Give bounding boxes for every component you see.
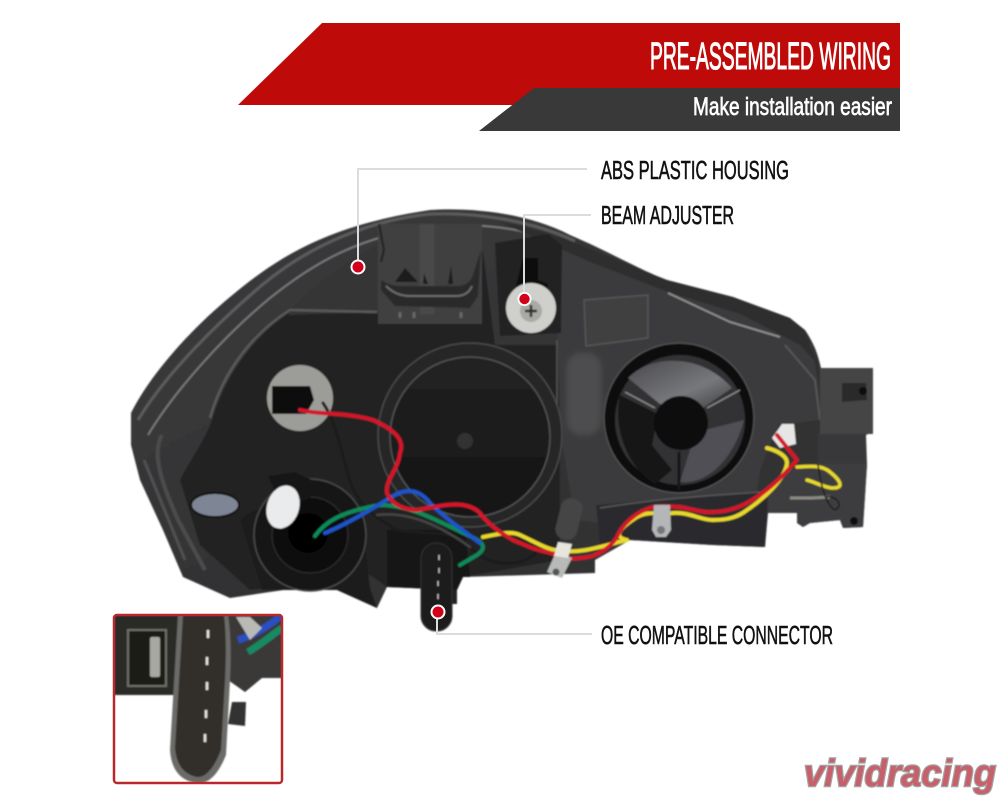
leader: connector (437, 616, 592, 634)
clip screw (552, 568, 560, 576)
cup gloss bottom (680, 420, 744, 482)
blue wire (325, 491, 480, 543)
cup inner disc (615, 355, 745, 485)
connector pins (438, 555, 439, 599)
inset blue wire (238, 615, 282, 640)
right round dust cup (604, 343, 754, 493)
inset connector face (175, 615, 226, 777)
cup center (654, 396, 708, 450)
label: oe compatible connector: OE COMPATIBLE CONNECTOR (601, 622, 833, 650)
dot: beam adjuster (518, 292, 532, 306)
right yellow loop (797, 466, 840, 488)
tray dividing line (600, 492, 760, 508)
grey wire (377, 514, 470, 547)
cup gloss left dark (618, 395, 672, 484)
right bracket (768, 368, 873, 528)
bracket lower block (768, 464, 867, 528)
dark subtitle banner (479, 88, 900, 131)
housing ridge highlight (668, 293, 780, 337)
cap face (390, 357, 550, 517)
subtitle: make installation easier: Make installation easier (693, 93, 892, 121)
socket ring (254, 479, 366, 591)
white cutout near bracket (772, 424, 796, 448)
leader: abs housing (358, 169, 587, 262)
leader: beam adjuster (524, 215, 591, 295)
inset panel: connector close-up (114, 615, 282, 783)
cup outer ring (604, 343, 754, 493)
callout dots (350, 260, 532, 620)
socket hole (288, 513, 328, 553)
right housing panel (555, 240, 820, 525)
inset red border (114, 615, 282, 783)
red title banner (238, 23, 900, 105)
wire clip right (652, 505, 671, 537)
inner dark panel (180, 250, 560, 590)
inset dark housing right (222, 615, 282, 692)
connector U inner (386, 286, 472, 296)
label: beam adjuster: BEAM ADJUSTER (601, 202, 734, 230)
inset white wire clip (236, 617, 262, 640)
cap outer ring (378, 343, 562, 527)
lower right tray (596, 490, 768, 547)
right black loop (818, 465, 839, 510)
cap nub (457, 433, 473, 449)
connector back panel (378, 224, 482, 324)
socket inner ring (272, 497, 348, 573)
wire harness (300, 403, 840, 565)
connector body (421, 543, 452, 631)
connector pins (395, 266, 453, 284)
green wire (315, 505, 483, 565)
adjuster recess (495, 234, 562, 336)
white bulb and black lead (261, 472, 312, 533)
watermark logo: vividracing (804, 753, 996, 795)
pillar (553, 496, 585, 542)
rib (556, 340, 558, 420)
white bulb (261, 481, 305, 533)
red wire (300, 410, 797, 559)
stamp rectangle (584, 295, 648, 346)
cup bottom spoke (678, 452, 680, 490)
inset pins (205, 630, 208, 742)
inset white background (114, 615, 282, 783)
connector light streak (420, 224, 434, 314)
inset terminal socket (128, 630, 166, 686)
inset dark housing left (114, 615, 178, 695)
headlight photo illustration (131, 209, 873, 631)
wire clip left (547, 542, 572, 578)
connector U socket (381, 250, 481, 308)
bracket band (818, 434, 866, 464)
large dust cap (378, 343, 562, 527)
adjuster screw head (520, 300, 542, 322)
black wire (323, 403, 537, 563)
connector edge (379, 224, 384, 262)
bracket tab (842, 383, 867, 402)
clip metal (652, 505, 671, 537)
lower left dark socket panel (240, 500, 377, 608)
inset green wire (248, 628, 282, 652)
yellow wire (483, 448, 787, 551)
inset metal pin (150, 637, 160, 677)
upper ledge panel (288, 245, 378, 315)
screw stud (790, 497, 830, 498)
clip screw (657, 526, 665, 534)
label: abs plastic housing: ABS PLASTIC HOUSING (601, 157, 789, 185)
adjuster washer (506, 283, 556, 333)
leader lines (358, 169, 592, 634)
beam adjuster (495, 234, 562, 336)
lower socket (254, 479, 366, 591)
clip band (554, 542, 572, 558)
housing rim bands (138, 214, 575, 570)
lower block (387, 530, 470, 590)
adjuster bracket (515, 258, 548, 298)
inset photo contents (114, 615, 282, 783)
bracket upper block (820, 368, 873, 434)
adjuster screw cross (525, 305, 537, 317)
dark top edge strip (500, 222, 818, 365)
connector housing upper (378, 224, 482, 324)
dot: abs housing (350, 260, 366, 274)
upper bulb socket (267, 365, 333, 431)
headlight housing silhouette (131, 209, 873, 608)
lighter blob (567, 353, 601, 435)
oe connector (421, 543, 457, 631)
inset connector tab (228, 702, 246, 726)
header banner (238, 23, 900, 131)
lower screw hole (850, 517, 858, 525)
dot: connector (430, 604, 446, 620)
socket washer (267, 365, 333, 431)
clip metal (547, 552, 572, 578)
bracket hole (859, 387, 867, 395)
oval marker (191, 493, 239, 517)
cup spokes (625, 390, 740, 408)
ridge lower (785, 345, 820, 420)
bulb plug (272, 386, 314, 414)
cup gloss top (628, 361, 732, 410)
inset connector shell (170, 615, 231, 783)
ledge highlight (210, 310, 377, 418)
bulb socket black (268, 472, 312, 505)
connector rivets (400, 312, 461, 318)
connector tab (448, 590, 457, 604)
oval side marker (191, 493, 239, 517)
